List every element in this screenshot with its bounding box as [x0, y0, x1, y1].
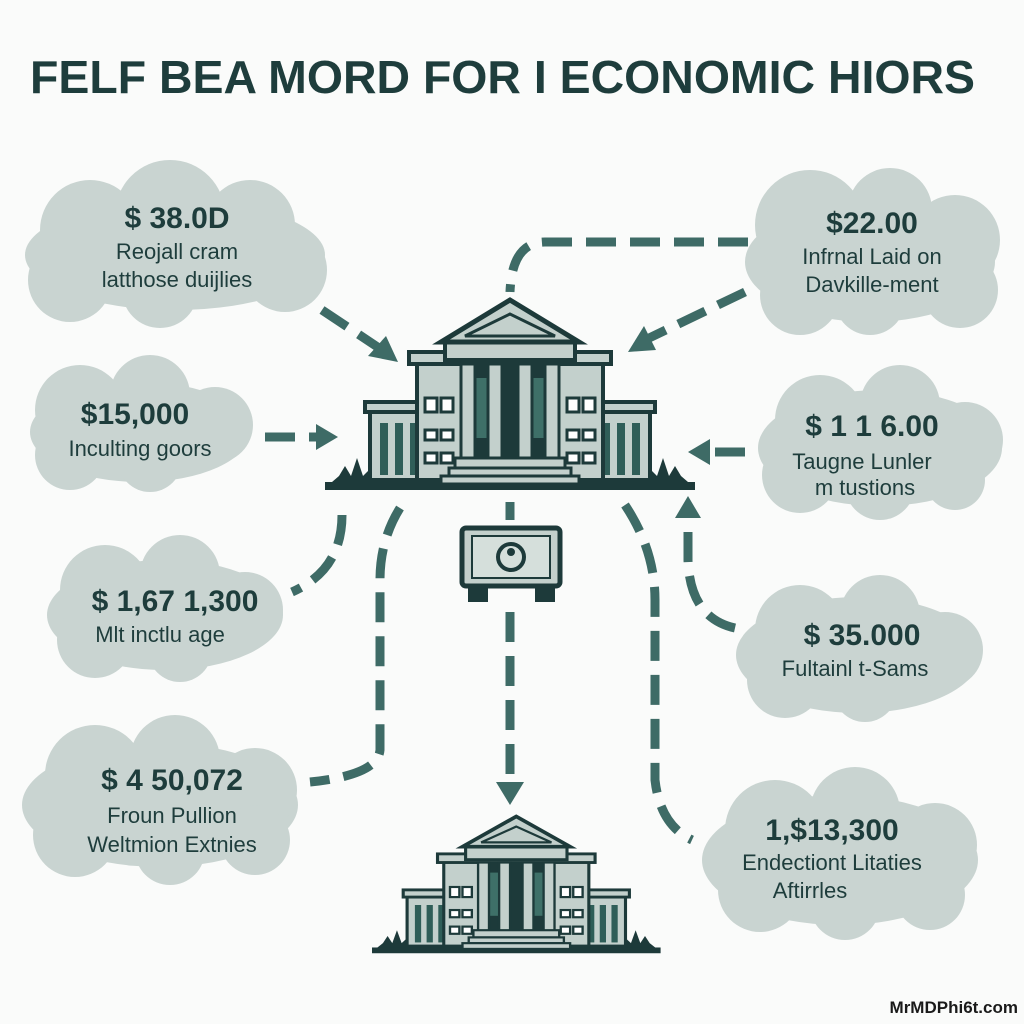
cloud 2: Infrnal Laid on — [802, 244, 942, 269]
cloud 8 — [702, 767, 978, 940]
cloud 8: Aftirrles — [773, 878, 847, 903]
cloud 3: Inculting goors — [68, 436, 212, 461]
cloud 1: Reojall cram — [116, 239, 238, 264]
cloud 4: $ 1 1 6.00 — [805, 410, 939, 443]
cloud 7: Froun Pullion — [107, 803, 237, 828]
cloud 7 — [22, 715, 298, 885]
cloud 4: m tustions — [815, 475, 915, 500]
cloud 8: 1,$13,300 — [765, 814, 899, 847]
cloud 7: $ 4 50,072 — [101, 764, 243, 797]
arrows — [265, 242, 748, 840]
cloud 5 — [47, 535, 283, 682]
cloud 4 — [758, 365, 1003, 520]
cloud 6: $ 35.000 — [804, 619, 920, 652]
cloud 6: Fultainl t-Sams — [782, 656, 928, 681]
cloud 5: Mlt inctlu age — [95, 622, 225, 647]
cloud 1: $ 38.0D — [124, 202, 230, 235]
cloud 4: Taugne Lunler — [792, 449, 932, 474]
cloud 3: $15,000 — [81, 398, 189, 431]
cloud 8: Endectiont Litaties — [742, 850, 922, 875]
icon: money — [462, 528, 560, 602]
cloud 2: Davkille-ment — [805, 272, 939, 297]
building: main — [325, 300, 695, 490]
cloud 1: latthose duijlies — [102, 267, 252, 292]
building: bottom — [372, 816, 661, 953]
arrowheads — [316, 326, 710, 805]
cloud 3 — [30, 355, 253, 492]
cloud 7: Weltmion Extnies — [87, 832, 257, 857]
watermark: MrMDPhi6t.com — [890, 998, 1018, 1017]
cloud 6 — [736, 575, 983, 722]
cloud 1 — [25, 160, 327, 328]
cloud 5: $ 1,67 1,300 — [92, 585, 258, 618]
cloud 2: $22.00 — [826, 207, 918, 240]
title: FELF BEA MORD FOR I ECONOMIC HIORS — [30, 51, 975, 103]
cloud 2 — [745, 168, 1000, 335]
